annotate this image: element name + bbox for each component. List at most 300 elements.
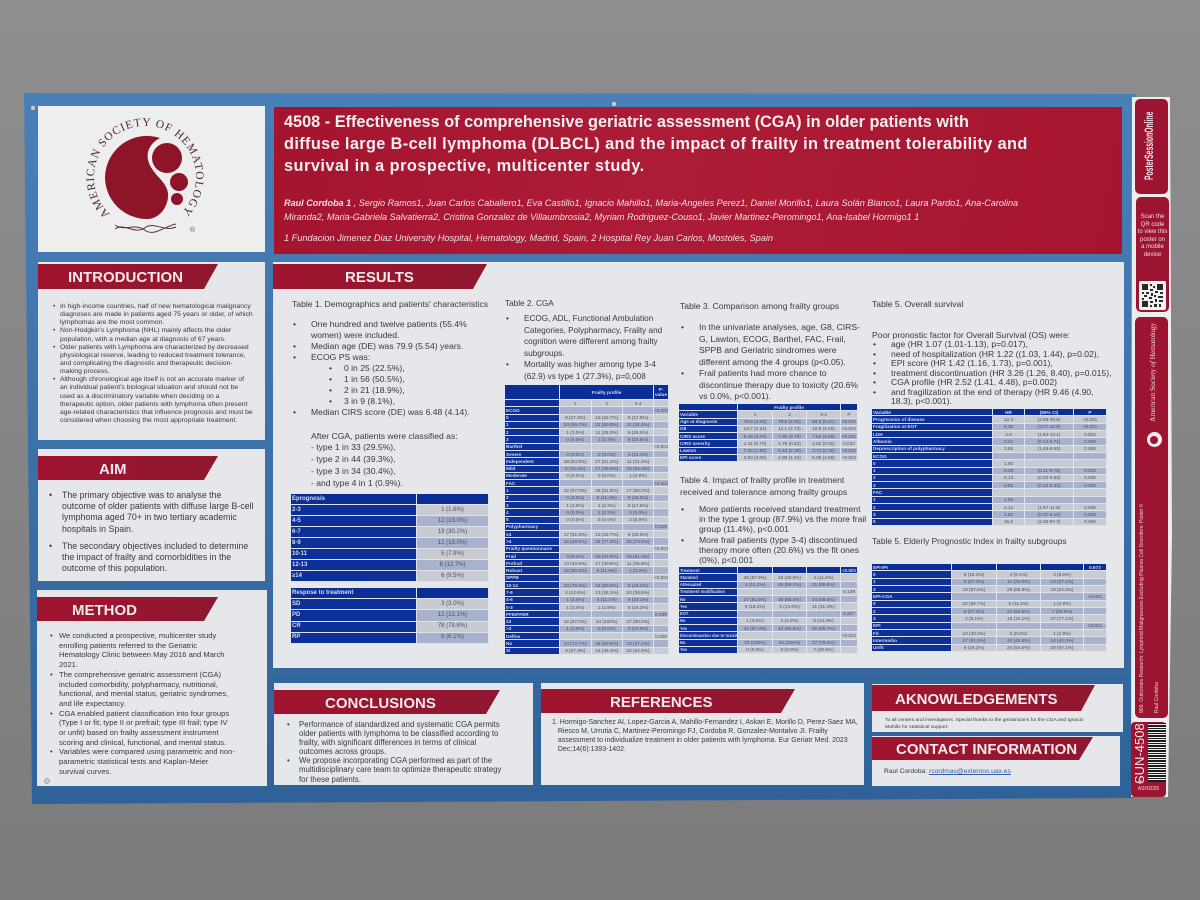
table: CGA by frailty profile: 18 (50.0%) — [595, 583, 618, 588]
table: comparison among frailty groups: 5.48 (3.74) — [744, 434, 766, 439]
column: table 4 text: Table 4. Impact of frailty profile in treatment — [680, 475, 844, 485]
table: treatment and tolerance: 5 (14.3%) — [813, 618, 834, 623]
table: response to treatment: 6 (6.1%) — [441, 634, 464, 640]
table: overall survival — [872, 409, 1106, 525]
table: elderly prognostic index: Fit — [873, 631, 879, 636]
column: table 5 text: and fragilization at the end of therapy (HR 9.46 (4.90, — [891, 386, 1094, 396]
table: comparison among frailty groups: 7.33 (1.65) — [744, 448, 766, 453]
table: comparison among frailty groups: 3-4 — [820, 412, 827, 417]
table: treatment and tolerance: 4 (12.1%) — [745, 582, 765, 587]
table: CGA by frailty profile: 1 (2.3%) — [598, 503, 616, 508]
table: CGA by frailty profile: 4 — [506, 510, 509, 515]
text: introduction: therapeutic option, older patients with lymphoma often present — [60, 401, 247, 408]
table: elderly prognostic index: 19 (57.6%) — [963, 587, 985, 592]
column: table 1 text: - type 3 in 34 (30.4%), — [311, 466, 396, 476]
table: overall survival: Progression of disease — [873, 417, 925, 422]
table: overall survival: (0.13-2.32) — [1038, 483, 1060, 488]
text: method: The comprehensive geriatric assessment (CGA) — [59, 670, 221, 679]
table: elderly prognostic index: 24 (54.5%) — [1007, 645, 1030, 650]
table: elderly prognostic index: 3 — [873, 587, 876, 592]
table: E prognosis: 5 (7.9%) — [441, 550, 464, 556]
session tab — [1135, 317, 1168, 718]
text: introduction: population, with a median age at diagnosis of 67 years. — [60, 336, 226, 343]
logo: ring text: AMERICAN SOCIETY OF HEMATOLOGY — [86, 118, 204, 217]
table: treatment and tolerance: 42 (95.5%) — [778, 626, 801, 631]
column: table 2 text — [505, 299, 662, 380]
text: introduction: Although chronological age itself is not an accurate marker of — [60, 376, 244, 383]
table: CGA by frailty profile: Moderate — [506, 473, 527, 478]
table: CGA by frailty profile: 5 (19.2%) — [628, 583, 648, 588]
table: treatment and tolerance: 0 (0.0%) — [746, 647, 764, 652]
table: overall survival: 5 — [873, 519, 876, 524]
panel: references — [541, 683, 864, 785]
table: treatment and tolerance: 0.207 — [843, 611, 855, 616]
table: CGA by frailty profile: 6 (17.6%) — [628, 503, 648, 508]
column: table 4 text — [680, 475, 866, 565]
table: overall survival: 1 — [873, 468, 876, 473]
table: elderly prognostic index: 5 (15.2%) — [964, 572, 984, 577]
table: CGA by frailty profile: 19 (61.3%) — [627, 554, 649, 559]
table: treatment and tolerance: No — [680, 640, 685, 645]
table: CGA by frailty profile: 10-12 — [506, 583, 518, 588]
authors — [284, 198, 1018, 222]
table: CGA by frailty profile: PFEIFFER — [506, 612, 529, 617]
heading: introduction: INTRODUCTION — [68, 269, 183, 286]
table: E prognosis: Eprognosis — [292, 496, 325, 502]
ASH small icon — [1147, 432, 1162, 447]
table: E prognosis: ≥14 — [292, 572, 302, 578]
panel: introduction — [38, 262, 265, 440]
table: CGA by frailty profile: 4 (13.8%) — [565, 590, 585, 595]
column: table 3 text: Table 3. Comparison among frailty groups — [680, 301, 839, 311]
affiliations: 1 Fundacion Jimenez Diaz University Hospital, Hematology, Madrid, Spain, 2 Hospital Rey Juan Carlos, Mostoles, Spain — [284, 233, 773, 243]
table: elderly prognostic index: 20 (45.5%) — [1007, 638, 1030, 643]
table: CGA by frailty profile: 0 (0.0%) — [598, 473, 616, 478]
table: CGA by frailty profile: 9 (26.5%) — [628, 495, 648, 500]
table: E prognosis: 19 (30.2%) — [438, 528, 467, 534]
table: CGA by frailty profile: ≤4 — [506, 532, 511, 537]
table: CGA by frailty profile: 10 (22.7%) — [595, 415, 618, 420]
text: aim: outcome of older patients with diffuse large B-cell — [62, 501, 254, 511]
table: comparison among frailty groups: Frailty profile — [774, 405, 804, 410]
table: comparison among frailty groups: 1.76 (0.52) — [778, 441, 801, 446]
QR instruction: a mobile — [1141, 244, 1164, 250]
text: introduction: and complicating the diagnostic and therapeutic decision- — [60, 360, 233, 367]
text: introduction: Non-Hodgkin's Lymphoma (NHL) mainly affects the older — [60, 327, 231, 334]
table: treatment and tolerance: 30 (85.7%) — [812, 626, 835, 631]
column: table 4 text: received and tolerance among frailty groups — [680, 487, 847, 497]
table: comparison among frailty groups: <0.001 — [842, 448, 856, 453]
column: table 1 text: After CGA, patients were classified as: — [311, 430, 458, 440]
table: elderly prognostic index: 2 — [873, 609, 876, 614]
table: CGA by frailty profile: 6 (23.1%) — [628, 597, 648, 602]
table: treatment and tolerance: No — [680, 597, 685, 602]
table: comparison among frailty groups: 0.034 — [843, 441, 855, 446]
table: CGA by frailty profile: 7-9 — [506, 590, 513, 595]
table: elderly prognostic index: 20 (57.1%) — [1051, 645, 1073, 650]
logo: American Society of Hematology — [86, 118, 204, 234]
table: CGA by frailty profile: <0.001 — [654, 444, 668, 449]
text: method: included comorbidity, polypharmacy, nutritional, — [59, 680, 218, 689]
table: response to treatment: Respose to treatment — [292, 590, 353, 596]
table: treatment and tolerance: 7 (20.6%) — [813, 647, 834, 652]
table: elderly prognostic index: 3 (8.6%) — [1053, 572, 1071, 577]
table: elderly prognostic index: 1 (2.9%) — [1053, 631, 1071, 636]
table: CGA by frailty profile: 5 — [506, 517, 509, 522]
table: overall survival: 1.00 — [1004, 461, 1013, 466]
table: CGA by frailty profile: 24 (72.7%) — [564, 641, 587, 646]
table: overall survival: 0.006 — [1084, 505, 1096, 510]
table: overall survival: <0.001 — [1083, 424, 1097, 429]
table: CGA by frailty profile: 2 — [506, 495, 509, 500]
table: overall survival: 4.9 — [1005, 432, 1012, 437]
column: table 3 text: different among the 4 groups (p<0.05). — [699, 356, 846, 366]
table: elderly prognostic index: 27 (77.1%) — [1051, 616, 1073, 621]
table: overall survival: (3.89-38.6) — [1038, 417, 1060, 422]
table: E prognosis: 6 (9.5%) — [441, 572, 464, 578]
title text: diffuse large B-cell lymphoma (DLBCL) and the impact of frailty in treatment tolerability and — [284, 135, 1028, 153]
column: table 5 text: treatment discontinuation (HR 3.26 (1.26, 8.40), p=0.015), — [891, 368, 1111, 378]
table: E prognosis: 10-11 — [292, 550, 307, 556]
text: aim — [49, 490, 254, 573]
table: CGA by frailty profile: Robust — [506, 568, 522, 573]
table: elderly prognostic index: Intermedio — [873, 638, 897, 643]
table: CGA by frailty profile: Severe — [506, 452, 521, 457]
table: treatment and tolerance: Standard — [680, 575, 698, 580]
text: conclusions: multidisciplinary care team to optimize therapeutic strategy — [299, 765, 501, 774]
table: treatment and tolerance: Attenuated — [680, 582, 701, 587]
table: CGA by frailty profile: Frailty profile — [592, 390, 621, 394]
column: table 1 text: • 2 in 21 (18.9%), — [329, 385, 405, 395]
text: conclusions: Performance of standardized and systematic CGA permits — [299, 720, 500, 729]
session code: SUN-4508 — [1132, 724, 1147, 784]
table: CGA by frailty profile: 8 (23.5%) — [628, 437, 648, 442]
table: comparison among frailty groups: Lawton — [680, 448, 696, 453]
table: CGA by frailty profile: 1 (3.4%) — [566, 597, 584, 602]
table: overall survival: 2 — [873, 505, 876, 510]
text: introduction: used as a discriminatory variable when deciding on a — [60, 393, 219, 400]
table: CGA by frailty profile: 27 (90.0%) — [627, 619, 649, 624]
panel: title — [274, 107, 1122, 254]
table: CGA by frailty profile: 22 (50.0%) — [595, 422, 618, 427]
text: acknowledgements: To all centers and investigators. Special thanks to the geriatricians for the CGA and Ignacio — [885, 718, 1083, 723]
table: CGA by frailty profile: 2 — [506, 430, 509, 435]
table: treatment and tolerance — [679, 567, 857, 653]
panel: contact information — [872, 736, 1120, 786]
table: overall survival: P — [1088, 410, 1092, 415]
table: overall survival: 1.00 — [1004, 497, 1013, 502]
table: treatment and tolerance: 6 (18.2%) — [745, 604, 765, 609]
table: elderly prognostic index: EPI-IPI — [873, 565, 888, 570]
table: treatment and tolerance: 11 (31.4%) — [812, 604, 835, 609]
table: E prognosis: 8-9 — [292, 540, 301, 546]
table: elderly prognostic index: 29 (65.9%) — [1007, 587, 1030, 592]
table: overall survival: 1 — [873, 497, 876, 502]
table: CGA by frailty profile: 22 (62.9%) — [627, 648, 649, 653]
table: response to treatment: CR — [292, 623, 301, 629]
table: comparison among frailty groups: Variable — [680, 412, 698, 417]
table: CGA by frailty profile: 44 (100%) — [596, 619, 618, 624]
table: CGA by frailty profile: 0 (0.0%) — [566, 495, 584, 500]
table: overall survival: <0.001 — [1083, 417, 1097, 422]
table: CGA by frailty profile: 11 (25.0%) — [595, 430, 618, 435]
table: treatment and tolerance: EOT — [680, 611, 688, 616]
table: overall survival: 8.38 — [1004, 424, 1013, 429]
table: response to treatment: 12 (12.1%) — [438, 612, 467, 618]
table: E prognosis: 6-7 — [292, 528, 301, 534]
text: conclusions: frailty, with significant differences in terms of clinical — [299, 738, 476, 747]
table: CGA by frailty profile: Frail — [506, 554, 516, 559]
table: elderly prognostic index: 4 (9.1%) — [1010, 572, 1027, 577]
table: CGA by frailty profile: 5 (15.2%) — [565, 466, 585, 471]
table: CGA by frailty profile: value — [655, 392, 667, 397]
sponsor tab: Poster Session Online — [1135, 99, 1168, 194]
table: overall survival: 0.558 — [1084, 512, 1096, 517]
table: comparison among frailty groups: CIRS severity — [680, 441, 710, 446]
table: CGA by frailty profile: Barthel — [506, 444, 522, 449]
table: CGA by frailty profile: <0.001 — [654, 575, 668, 580]
table: elderly prognostic index: 15 (34.1%) — [1007, 616, 1030, 621]
table: treatment and tolerance: 18 (40.9%) — [778, 575, 801, 580]
table: CGA by frailty profile: P- — [659, 387, 663, 392]
table: overall survival: 4.12 — [1004, 505, 1013, 510]
table: CGA by frailty profile: 1 (2.9%) — [629, 473, 647, 478]
table: comparison among frailty groups: 10.9 (2.49) — [812, 426, 835, 431]
table: CGA by frailty profile: ECOG — [506, 408, 520, 413]
table: CGA by frailty profile: 0 — [506, 415, 509, 420]
column: table 3 text: vs 0.0%, p<0.001). — [699, 391, 771, 401]
table: overall survival: 0.399 — [1084, 483, 1096, 488]
column: table 5 text: EPI score (HR 1.42 (1.16, 1.73), p=0.001), — [891, 358, 1053, 368]
text: method: scoring and clinical, functional, and mental status. — [59, 738, 226, 747]
table: CGA by frailty profile: 2 (5.9%) — [629, 517, 647, 522]
table: CGA by frailty profile: 28 (63.6%) — [595, 641, 618, 646]
table: E prognosis: 12 (19.0%) — [438, 518, 467, 524]
table: comparison among frailty groups: 7.52 (3.68) — [812, 434, 835, 439]
table: comparison among frailty groups: <0.001 — [842, 419, 856, 424]
text: method: We conducted a prospective, multicenter study — [59, 631, 216, 640]
table: CGA by frailty profile: 10 (38.5%) — [627, 590, 649, 595]
column: table 1 text: ECOG PS was: — [311, 352, 370, 362]
column: table 3 text: SPPB and Geriatric sindromes were — [699, 345, 837, 355]
table: elderly prognostic index: 9 (27.3%) — [964, 579, 984, 584]
heading: contact information — [872, 737, 1093, 760]
table: CGA by frailty profile: 13 (37.1%) — [627, 641, 649, 646]
sponsor wordmark: PosterSessionOnline — [1144, 112, 1156, 180]
table: comparison among frailty groups: Age at diagnosis — [680, 419, 718, 424]
column: table 2 text: Mortality was higher among type 3-4 — [524, 360, 656, 369]
table: overall survival: 3.55 — [1004, 446, 1013, 451]
table: CGA by frailty profile: 16 (50.0%) — [564, 568, 587, 573]
table: overall survival: HR — [1005, 410, 1012, 415]
text: conclusions: outcomes across groups. — [299, 747, 386, 756]
table: overall survival: (2.30-97.3) — [1038, 519, 1060, 524]
table: CGA by frailty profile: 20 (47.6%) — [595, 554, 618, 559]
heading: references — [541, 689, 795, 713]
text: introduction: diagnoses are made in patients aged 75 years or older, of which — [60, 311, 253, 318]
table: treatment and tolerance: 24 (68.6%) — [812, 597, 835, 602]
text: method: survival curves. — [59, 767, 111, 776]
text: acknowledgements: Mahillo for statistical support. — [885, 725, 949, 730]
heading: conclusions — [274, 690, 500, 714]
table: comparison among frailty groups: <0.001 — [842, 426, 856, 431]
table: CGA by frailty profile: 1 (3.0%) — [566, 503, 584, 508]
column: table 1 text: women) were included. — [311, 330, 399, 340]
table: CGA by frailty profile: 16 (48.5%) — [564, 539, 587, 544]
table: comparison among frailty groups: 7.35 (3.79) — [778, 434, 801, 439]
column: table 3 text: G, Lawton, ECOG, Barthel, FAC, Frail, — [699, 334, 846, 344]
table: comparison among frailty groups: 2 — [788, 412, 791, 417]
table: treatment and tolerance: 2 (4.5%) — [781, 618, 798, 623]
table: comparison among frailty groups: 4.89 (1.43) — [778, 455, 801, 460]
table: treatment and tolerance: No — [680, 618, 685, 623]
table: overall survival: 0.005 — [1084, 475, 1096, 480]
table: CGA by frailty profile: 0.019 — [655, 524, 667, 529]
table: CGA by frailty profile: 3 — [506, 503, 509, 508]
text: introduction: physiological reserve, leading to reduced treatment tolerance, — [60, 352, 246, 359]
table: overall survival: Deprescription of polypharmacy — [873, 446, 945, 451]
column: table 1 text: One hundred and twelve patients (55.4% — [311, 319, 467, 329]
table: CGA by frailty profile: 9 (27.3%) — [565, 415, 585, 420]
table: overall survival: (0.14-0.71) — [1038, 439, 1060, 444]
table: CGA by frailty profile: 0.039 — [655, 612, 667, 617]
text: references: Dec;14(6):1393-1402. — [558, 746, 626, 753]
table: CGA by frailty profile: <0.001 — [654, 546, 668, 551]
table: elderly prognostic index: 3 — [873, 616, 876, 621]
caption: elderly prognostic index: Table 5. Elderly Prognostic Index in frailty subgroups — [872, 536, 1067, 546]
table: CGA by frailty profile: 17 (51.5%) — [564, 532, 587, 537]
session title: 906. Outcomes Research: Lymphoid Malignancies Excluding Plasma Cell Disorders: Poster II — [1139, 504, 1145, 713]
table: elderly prognostic index: 9 (27.3%) — [964, 609, 984, 614]
column: table 1 text: Table 1. Demographics and patients' characteristics — [292, 299, 488, 309]
QR instruction: poster on — [1140, 237, 1165, 243]
table: treatment and tolerance: 38 (86.4%) — [778, 597, 801, 602]
table: CGA by frailty profile: 5 (19.2%) — [628, 605, 648, 610]
panel: results — [273, 262, 1124, 668]
table: comparison among frailty groups: 79.6 (4.03) — [778, 419, 801, 424]
column: table 5 text: Poor pronostic factor for Overall Survival (OS) were: — [872, 330, 1070, 340]
table: E prognosis: 2-3 — [292, 506, 301, 512]
title text — [284, 113, 1028, 175]
table: elderly prognostic index: Unfit — [873, 645, 884, 650]
table: CGA by frailty profile: 4 (11.4%) — [628, 452, 648, 457]
table: E prognosis: 12-13 — [292, 562, 307, 568]
column: table 1 text: - type 2 in 44 (39.3%), — [311, 454, 396, 464]
table: CGA by frailty profile: 16 (36.4%) — [595, 648, 618, 653]
column: table 2 text: subgroups. — [524, 348, 565, 358]
text: method: or unfit) based on frailty assessment instrument — [59, 728, 219, 737]
table: overall survival: Albumin — [873, 439, 892, 444]
table: elderly prognostic index: 11 (25.0%) — [1007, 579, 1030, 584]
table: elderly prognostic index: 1 — [873, 579, 876, 584]
table: elderly prognostic index: 10 (30.3%) — [963, 631, 985, 636]
table: overall survival: 0.014 — [1084, 468, 1096, 473]
table: elderly prognostic index: <0.001 — [1088, 623, 1102, 628]
table: CGA by frailty profile: 0.008 — [655, 634, 667, 639]
table: CGA by frailty profile: 1 (2.8%) — [598, 605, 616, 610]
column: table 5 text: Table 5. Overall survival — [872, 299, 963, 309]
table: elderly prognostic index: 1 (2.9%) — [1053, 601, 1071, 606]
table: CGA by frailty profile: 4 (11.1%) — [597, 597, 617, 602]
panel: right side strip — [1131, 97, 1172, 797]
table: response to treatment: 78 (78.8%) — [438, 623, 467, 629]
table: CGA by frailty profile: 1 — [574, 401, 577, 406]
table: elderly prognostic index: 19 (54.3%) — [1051, 587, 1073, 592]
table: treatment and tolerance: 0 (0.0%) — [781, 647, 798, 652]
text: acknowledgements — [885, 718, 1084, 730]
table: CGA by frailty profile: 10 (22.7%) — [595, 532, 618, 537]
table: CGA by frailty profile: 34 (77.3%) — [595, 539, 618, 544]
column: table 4 text: therapy more often (20.6%) vs the fit ones — [699, 545, 859, 555]
column: table 3 text: In the univariate analyses, age, G8, CIRS- — [699, 322, 860, 332]
title text: 4508 - Effectiveness of comprehensive geriatric assessment (CGA) in older patients with — [284, 113, 969, 131]
text: method: parametric statistical tests and Kaplan-Meier — [59, 757, 208, 766]
table: CGA by frailty profile: 1 (3.0%) — [566, 626, 584, 631]
table: elderly prognostic index: 6 (18.2%) — [964, 645, 984, 650]
table: CGA by frailty profile: 0 (0.0%) — [566, 517, 584, 522]
QR code — [1139, 281, 1166, 310]
panel: method — [37, 590, 267, 786]
text: method: enrolling patients referred to the Geriatric — [59, 641, 197, 650]
panel: acknowledgements — [872, 684, 1123, 732]
table: comparison among frailty groups: P — [847, 412, 851, 417]
authors: Miranda2, Maria-Gabriela Salvatierra2, Cristina Gonzalez de Villaumbrosia2, Myriam Rodriguez-Couso1, Javier Martinez-Peromingo1, Ana-Isabel Hormigo1 1 — [284, 212, 919, 222]
table: treatment and tolerance: 27 (81.8%) — [744, 597, 766, 602]
column: table 2 text: ECOG, ADL, Functional Ambulation — [524, 314, 653, 323]
presenter name: Raul Cordoba — [1154, 682, 1160, 713]
text: method: (Type I or fit; type II or prefrail; type III frail; type IV — [59, 718, 227, 727]
column: table 4 text: in the type 1 group (87.9%) vs the more frail — [699, 514, 866, 524]
table: CGA by frailty profile: 27 (61.4%) — [595, 459, 618, 464]
column: table 2 text: (62.9) vs type 1 (27.3%), p=0,008 — [524, 372, 646, 380]
text: conclusions: older patients with lymphoma to be classified according to — [299, 729, 498, 738]
column: table 1 text: - and type 4 in 1 (0.9%). — [311, 478, 403, 488]
QR instruction: device — [1144, 252, 1161, 258]
column: table 4 text: (0%), p<0.001 — [699, 555, 753, 565]
table: CGA by frailty profile: Frailty questionnaire — [506, 546, 552, 551]
table: CGA by frailty profile: 2 — [605, 401, 608, 406]
text: introduction: making process. — [60, 368, 110, 375]
heading: acknowledgements: AKNOWLEDGEMENTS — [895, 691, 1058, 708]
panel: logo — [38, 106, 265, 252]
table: overall survival: LDH — [873, 432, 883, 437]
table: treatment and tolerance: 6 (13.6%) — [779, 604, 800, 609]
logo: dna strand — [115, 224, 176, 232]
table: overall survival: 0.002 — [1084, 432, 1096, 437]
table: CGA by frailty profile: >4 — [506, 539, 511, 544]
text: references — [552, 718, 858, 753]
table: CGA by frailty profile: 13 (36.1%) — [595, 590, 618, 595]
table: overall survival: 0.006 — [1084, 446, 1096, 451]
heading: method: METHOD — [72, 602, 137, 619]
table: CGA by frailty profile: 3 — [506, 437, 509, 442]
QR instruction — [1138, 214, 1168, 258]
table: elderly prognostic index: 0 — [873, 572, 876, 577]
text: introduction: considered when choosing the most appropriate treatment. — [60, 417, 237, 424]
text: introduction: an individual patient's biological situation and should not be — [60, 384, 238, 391]
table: CGA by frailty profile: 13 (40.6%) — [564, 561, 587, 566]
text: references: assessment to individualize treatment in older patients with lymphoma. Eur Geriatr Med. 2023 — [558, 737, 848, 744]
heading: results — [273, 264, 487, 289]
table: treatment and tolerance: <0.001 — [842, 633, 856, 638]
table: CGA by frailty profile: 0 (0.0%) — [566, 437, 584, 442]
table: CGA by frailty profile — [505, 385, 668, 654]
table: overall survival: 0.31 — [1004, 439, 1013, 444]
table: overall survival: (3.07-22.9) — [1038, 424, 1060, 429]
column: table 3 text: Frail patients had more chance to — [699, 368, 827, 378]
table: overall survival: (0.37-6.10) — [1038, 512, 1060, 517]
table: overall survival: 12.3 — [1004, 417, 1013, 422]
